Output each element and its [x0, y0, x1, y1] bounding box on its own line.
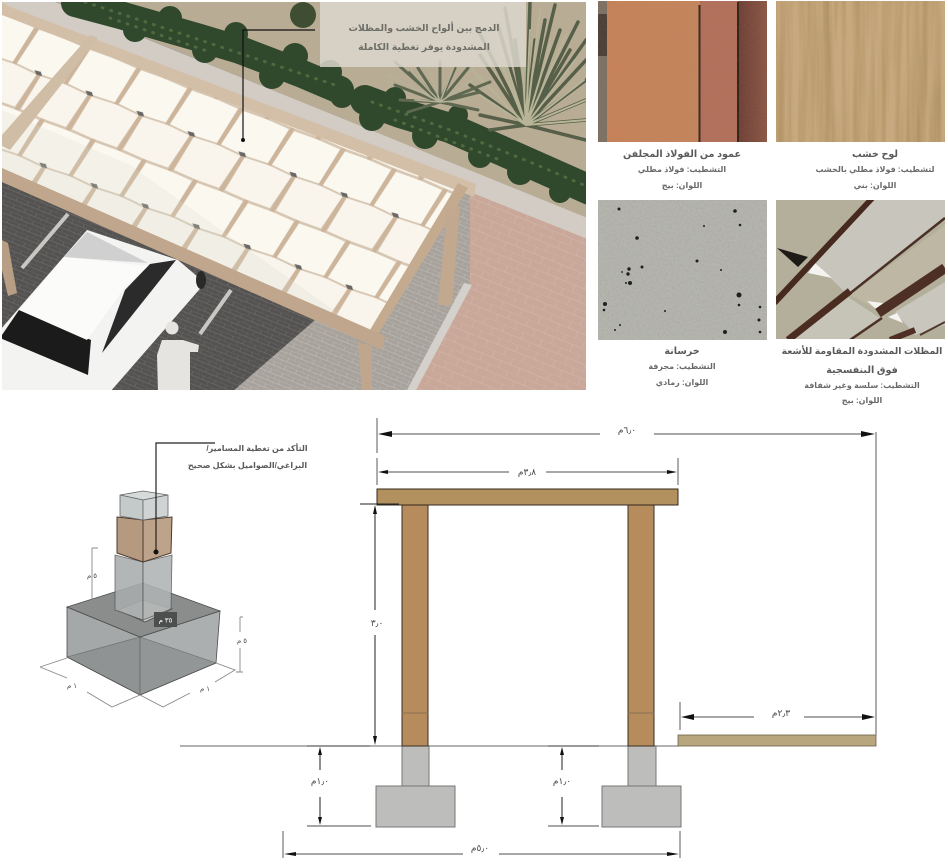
wood column base — [117, 517, 172, 562]
timber top beam — [377, 489, 678, 505]
column spacing dimension 5.0 m — [283, 831, 680, 858]
ground: brick paving — [413, 180, 586, 390]
swatch caption: tensile shade: التشطيب: سلسة وغير شفافة — [804, 381, 920, 390]
swatch caption: wood: اللوان: بني — [854, 181, 897, 190]
parking bay lines — [22, 214, 231, 334]
ground line — [180, 745, 678, 747]
swatch: wood plank — [776, 1, 945, 142]
dimension labels — [67, 573, 247, 693]
beam width dimension 3.8 m: ٣٫٨م — [518, 467, 536, 477]
concrete piers and footings — [376, 746, 681, 827]
ground: dark parking bays — [0, 180, 315, 392]
timber deck — [678, 735, 876, 746]
beam width dimension 3.8 m — [377, 458, 678, 485]
overall width dimension 6.0 m: ٦٫٠م — [618, 425, 636, 435]
dimension labels: ٥ م — [237, 638, 247, 645]
dimension labels: ١ م — [200, 686, 210, 693]
swatch caption: wood — [815, 149, 935, 190]
footing block — [67, 583, 220, 695]
swatch caption: tensile shade — [782, 345, 942, 405]
swatch caption: concrete: التشطيب: مجرفة — [648, 362, 716, 371]
swatch: galvanized steel column — [598, 1, 767, 142]
panel: aerial rendering of the parking shade — [0, 0, 590, 392]
swatch caption: steel: اللوان: بيج — [662, 181, 703, 190]
swatch caption: steel — [623, 149, 741, 190]
kerb at edge of brick paving — [406, 283, 472, 392]
faded pale shade tint — [18, 125, 337, 314]
footing depth dimension 1.0 m right — [548, 746, 599, 826]
dimension tag — [154, 612, 177, 627]
swatch caption: tensile shade: المظلات المشدودة المقاومة للأشعة — [782, 345, 942, 357]
timber columns — [402, 505, 654, 746]
hedges — [75, 0, 590, 203]
footing depth dimension 1.0 m right: ١٫٠م — [553, 776, 571, 786]
swatch caption: concrete — [648, 346, 716, 387]
leader line to roof — [241, 30, 315, 142]
dimension lines — [40, 548, 243, 707]
swatch caption: concrete: خرسانة — [664, 346, 700, 357]
swatch caption: steel: عمود من الفولاذ المجلفن — [623, 149, 741, 160]
swatch caption: wood: لوح خشب — [852, 149, 898, 160]
person in white — [157, 322, 199, 392]
callout: shade and wood planks: المشدودة يوفر تغطية الكاملة — [358, 41, 490, 53]
concrete pier — [115, 555, 172, 620]
note: bolts and nuts: البراغي/الصواميل بشكل صحيح — [188, 461, 307, 470]
shade sails on rafters — [2, 14, 466, 338]
footing depth dimension 1.0 m left: ١٫٠م — [311, 776, 329, 786]
diagram: isometric footing detail — [40, 491, 247, 707]
diagram: pergola section elevation — [180, 418, 876, 858]
swatch caption: wood: لتشطيب: فولاذ مطلي بالخشب — [815, 165, 935, 174]
spiky plants — [388, 2, 586, 140]
callout: shade and wood planks: الدمج بين ألواح الخشب والمظلات — [349, 21, 499, 34]
footing depth dimension 1.0 m left — [307, 746, 371, 826]
swatch: UV resistant tensile shade — [776, 200, 945, 340]
dimension tag: ٣٥ م — [159, 618, 173, 624]
note: bolts and nuts — [188, 443, 308, 470]
note: bolts and nuts: التأكد من تغطية المسامير/ — [206, 443, 308, 453]
dimension labels: ١ م — [67, 683, 77, 690]
swatch caption: tensile shade: اللوان: بيج — [842, 396, 883, 405]
glass cap — [120, 491, 168, 520]
column height dimension 3.0 m: ٣٫٠ — [371, 618, 383, 628]
swatch caption: steel: التشطيب: فولاذ مطلي — [638, 165, 726, 174]
ground: light paving — [2, 2, 470, 390]
rear beam — [2, 2, 476, 197]
cross rafter — [2, 35, 98, 150]
white car — [0, 230, 206, 392]
planting kerb — [0, 0, 590, 240]
swatch caption: concrete: اللوان: رمادي — [656, 378, 708, 387]
swatch: concrete — [598, 200, 767, 340]
overall width dimension 6.0 m — [377, 418, 876, 735]
dimension labels: ٥ م — [87, 573, 97, 580]
column height dimension 3.0 m — [360, 504, 399, 745]
ground: gravel planting bed — [55, 0, 590, 222]
deck width dimension 2.3 m: ٢٫٣م — [772, 708, 790, 718]
column spacing dimension 5.0 m: ٥٫٠م — [471, 843, 489, 853]
swatch caption: tensile shade: فوق البنفسجية — [826, 365, 898, 376]
deck width dimension 2.3 m — [680, 702, 875, 730]
end beam — [370, 183, 468, 333]
callout: shade and wood planks — [320, 2, 526, 67]
leader line: bolts — [154, 443, 215, 554]
front beam — [2, 168, 385, 350]
posts — [2, 205, 460, 390]
